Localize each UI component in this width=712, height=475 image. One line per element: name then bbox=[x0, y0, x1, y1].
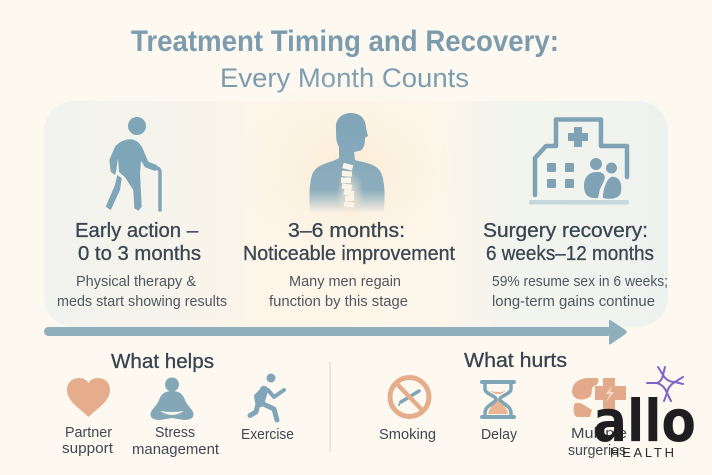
icon: torso with spine bbox=[309, 113, 385, 221]
icon: heart bbox=[67, 378, 110, 417]
divider bbox=[330, 362, 331, 452]
icon: multiple surgeries bbox=[572, 378, 626, 417]
logo: allo health: HEALTH bbox=[610, 445, 674, 460]
stage 2 text: Noticeable improvement bbox=[243, 243, 455, 265]
stage 1 text: 0 to 3 months bbox=[78, 243, 201, 265]
stage 1 text bbox=[57, 220, 227, 310]
icon: no smoking bbox=[390, 378, 429, 416]
stage 3 text: long-term gains continue bbox=[492, 294, 655, 310]
label: multiple surgeries: surgeries bbox=[568, 443, 626, 459]
stage 3 text: Surgery recovery: bbox=[483, 220, 648, 242]
icon: hourglass bbox=[480, 380, 516, 419]
logo: allo health bbox=[593, 367, 696, 460]
arrow: timeline bbox=[44, 320, 627, 344]
icon: purple star bbox=[647, 367, 683, 401]
label: exercise: Exercise bbox=[241, 427, 294, 443]
title: Every Month Counts bbox=[220, 63, 469, 93]
label: stress management bbox=[132, 425, 219, 458]
stage 1 text: Physical therapy & bbox=[76, 274, 196, 290]
stage 2 text: Many men regain bbox=[289, 274, 401, 290]
label: stress management: Stress bbox=[155, 425, 195, 441]
label: partner support: Partner bbox=[65, 425, 112, 441]
stage 2 text: function by this stage bbox=[269, 294, 408, 310]
label: stress management: management bbox=[132, 442, 219, 458]
icon: hospital with patient and carer bbox=[529, 120, 629, 204]
icon: runner bbox=[250, 374, 284, 420]
icon: meditating figure bbox=[150, 378, 194, 420]
heading: what helps: What helps bbox=[111, 351, 214, 373]
label: delay: Delay bbox=[481, 427, 518, 443]
stage 3 text bbox=[483, 220, 668, 310]
title: Treatment Timing and Recovery: bbox=[131, 25, 559, 58]
label: partner support bbox=[62, 425, 113, 457]
stage 3 text: 6 weeks–12 months bbox=[486, 243, 654, 265]
logo: allo health: allo bbox=[593, 387, 696, 455]
stage 1 text: meds start showing results bbox=[57, 294, 227, 310]
stage 1 text: Early action – bbox=[75, 220, 199, 242]
stage 2 text bbox=[243, 220, 455, 310]
icon: person walking with cane bbox=[106, 117, 160, 211]
label: multiple surgeries: Multiple bbox=[571, 426, 627, 442]
label: multiple surgeries bbox=[568, 426, 627, 459]
title bbox=[131, 25, 559, 93]
panel: timeline stages bbox=[44, 70, 668, 327]
label: smoking: Smoking bbox=[379, 427, 436, 443]
heading: what hurts: What hurts bbox=[464, 350, 567, 372]
stage 3 text: 59% resume sex in 6 weeks; bbox=[492, 274, 668, 290]
label: partner support: support bbox=[62, 441, 113, 457]
stage 2 text: 3–6 months: bbox=[288, 220, 405, 242]
